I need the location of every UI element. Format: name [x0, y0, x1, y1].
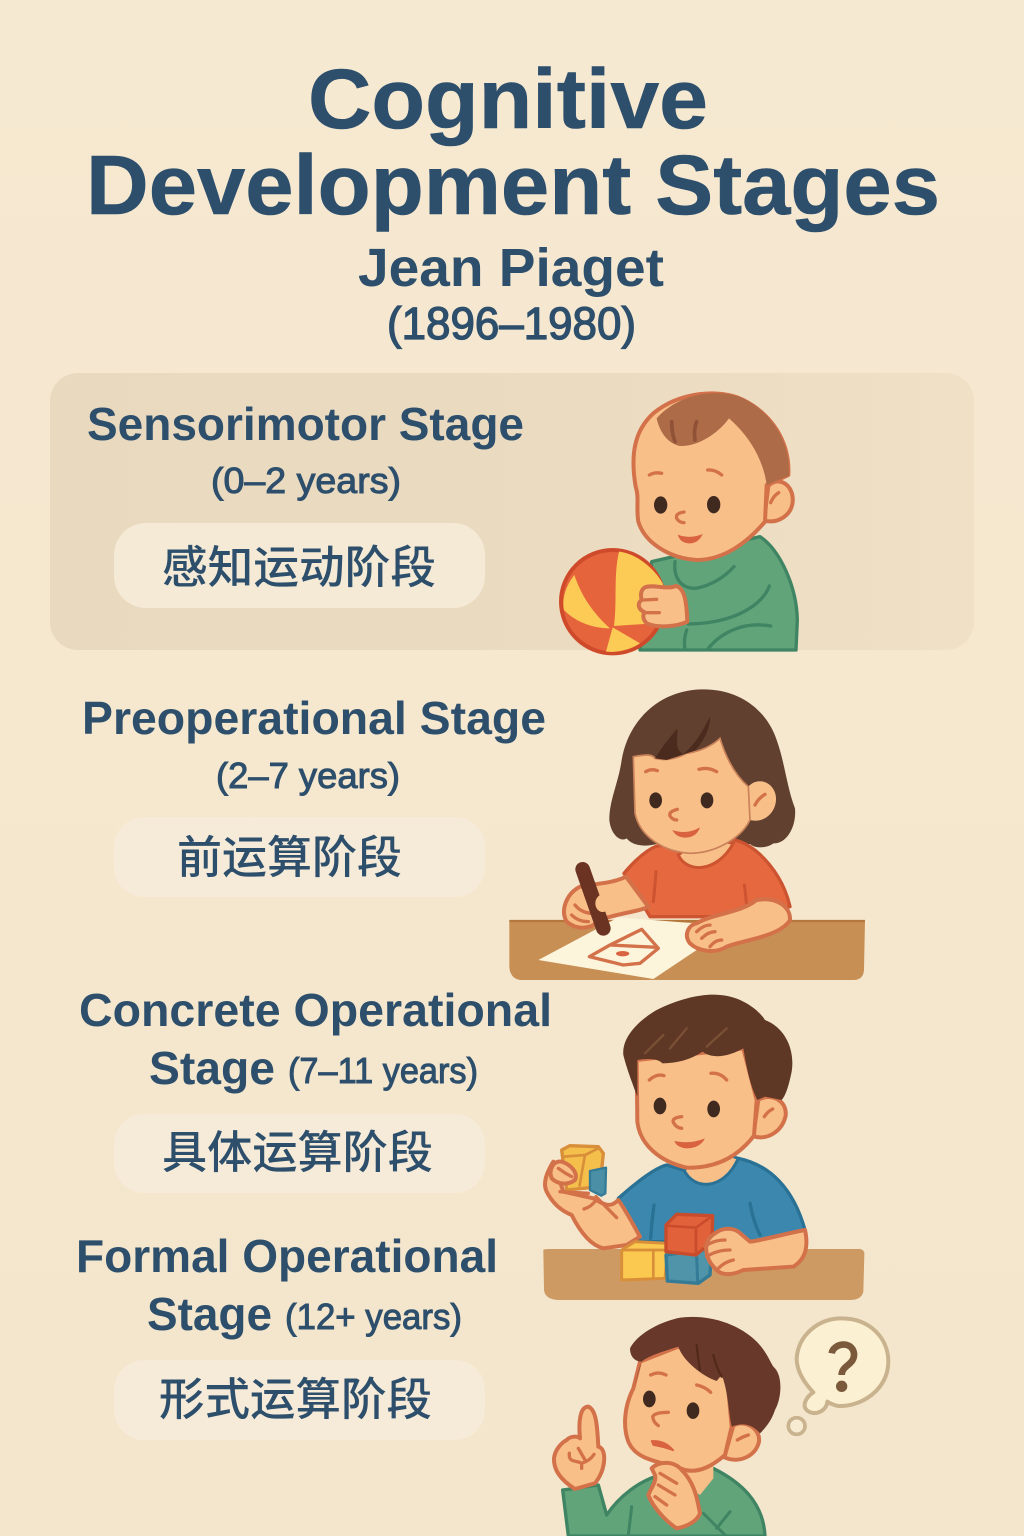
neck	[680, 1465, 713, 1495]
raised hand	[554, 1407, 604, 1489]
ear	[724, 1423, 759, 1460]
face	[651, 1373, 711, 1392]
title	[86, 52, 940, 232]
hair	[623, 995, 792, 1100]
illustration: boy with blocks	[543, 995, 864, 1300]
hair	[630, 1317, 780, 1433]
head	[637, 1048, 757, 1168]
title: Development Stages	[86, 138, 940, 232]
hair back	[609, 689, 795, 847]
hand on chin	[648, 1463, 700, 1528]
text: concrete operational stage	[79, 984, 552, 1193]
illustration: child thinking	[554, 1317, 888, 1536]
sweater	[563, 1468, 765, 1536]
text: concrete operational stage: (7–11 years)	[288, 1050, 478, 1091]
left arm	[564, 877, 648, 928]
table	[543, 1249, 864, 1300]
baby body	[640, 537, 797, 650]
neck	[684, 1148, 738, 1184]
text: preoperational stage: 前运算阶段	[177, 832, 402, 883]
ear	[764, 481, 793, 521]
shirt	[624, 840, 790, 917]
left arm	[545, 1162, 640, 1248]
face	[649, 1073, 727, 1080]
text: formal operational stage: Formal Operational	[76, 1230, 498, 1282]
right arm	[687, 899, 790, 951]
text: preoperational stage: Preoperational Stage	[82, 692, 546, 744]
title: Cognitive	[308, 52, 708, 146]
text: preoperational stage: (2–7 years)	[216, 755, 400, 796]
face	[633, 738, 750, 853]
text: formal operational stage: Stage	[147, 1288, 272, 1340]
yellow block	[622, 1242, 668, 1280]
ball	[561, 550, 664, 653]
head	[625, 1347, 732, 1471]
crayon	[583, 869, 603, 928]
text: concrete operational stage: Stage	[149, 1042, 275, 1094]
hand on ball	[639, 586, 687, 626]
text: sensorimotor stage: (0–2 years)	[211, 460, 401, 501]
red block	[666, 1214, 713, 1255]
face	[649, 470, 722, 475]
text: formal operational stage	[76, 1230, 498, 1440]
text: sensorimotor stage	[87, 398, 524, 608]
blue block	[666, 1248, 712, 1283]
illustration: girl drawing	[509, 689, 865, 980]
text: sensorimotor stage: 感知运动阶段	[162, 542, 436, 593]
neck	[678, 837, 733, 868]
illustration: baby with ball	[561, 393, 797, 653]
child's drawing	[589, 929, 658, 965]
text: concrete operational stage: Concrete Operational	[79, 984, 552, 1036]
text: sensorimotor stage: Sensorimotor Stage	[87, 398, 524, 450]
text: formal operational stage: (12+ years)	[285, 1296, 462, 1337]
subtitle: Jean Piaget: Jean Piaget	[358, 238, 664, 298]
thought bubble	[797, 1318, 888, 1413]
panel: sensorimotor stage background	[50, 373, 974, 650]
text: preoperational stage	[82, 692, 546, 897]
subtitle: Jean Piaget: (1896–1980)	[387, 298, 636, 349]
held block	[562, 1146, 603, 1190]
subtitle: Jean Piaget	[358, 238, 664, 349]
shirt	[618, 1158, 805, 1242]
text: concrete operational stage: 具体运算阶段	[162, 1127, 433, 1178]
question mark	[832, 1345, 854, 1375]
text: formal operational stage: 形式运算阶段	[159, 1374, 432, 1425]
right arm	[706, 1229, 806, 1274]
head	[633, 393, 788, 560]
paper	[538, 917, 697, 979]
ear	[753, 1097, 786, 1137]
table	[509, 921, 865, 980]
ear	[748, 781, 776, 821]
hair	[657, 393, 789, 485]
bangs	[655, 717, 710, 760]
